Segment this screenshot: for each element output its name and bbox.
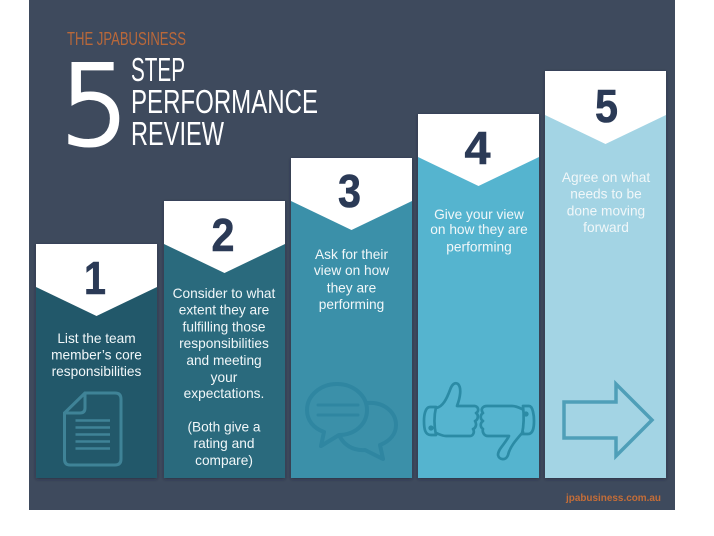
chevron: step 5	[545, 71, 666, 144]
icon: document	[64, 393, 121, 465]
chevron: step 3	[291, 158, 412, 230]
chevron: step 1	[36, 244, 157, 316]
panel: step 5	[545, 71, 666, 478]
text: step 3: performing	[319, 297, 384, 312]
text: step 2: expectations.	[184, 386, 264, 401]
text: step 2: your	[211, 370, 238, 385]
title block	[60, 29, 318, 170]
panel: step 4	[418, 114, 539, 478]
title eyebrow: THE JPABUSINESS	[67, 29, 186, 49]
number 5: 5	[595, 80, 618, 132]
text: step 2: extent they are	[179, 302, 269, 318]
text: step 1: member’s core	[51, 348, 142, 362]
text: step 1: List the team	[57, 331, 136, 346]
text: step 5: Agree on what	[562, 170, 650, 185]
text: step 4: Give your view	[434, 207, 524, 222]
text: step 2: rating and	[194, 436, 254, 451]
text: step 4: on how they are	[430, 222, 528, 237]
icon: speech bubbles	[307, 384, 396, 459]
panel: step 1	[36, 244, 157, 478]
text: step 5: done moving	[567, 204, 645, 218]
title line: review: REVIEW	[131, 115, 225, 152]
text: step 1: responsibilities	[52, 364, 142, 379]
number 1: 1	[84, 252, 106, 304]
text: step 2: Consider to what	[173, 286, 276, 301]
number 4: 4	[464, 122, 491, 174]
text: step 3: view on how	[314, 263, 389, 278]
text: step 3: they are	[327, 280, 376, 296]
text: step 2: fulfilling those	[183, 320, 265, 334]
panel: step 2	[164, 201, 285, 478]
text: step 2: responsibilities	[179, 336, 269, 351]
chevron: step 4	[418, 114, 539, 186]
footer url: jpabusiness.com.au	[565, 492, 661, 504]
text: step 3: Ask for their	[315, 247, 388, 262]
text: step 2: (Both give a	[187, 420, 261, 434]
icon: right arrow	[564, 384, 652, 456]
number 2: 2	[212, 209, 234, 261]
text: step 4: performing	[446, 240, 512, 254]
title line: performance: PERFORMANCE	[131, 83, 318, 120]
text: step 2: and meeting	[186, 353, 262, 368]
panel: step 3	[291, 158, 412, 478]
big numeral 5: 5	[60, 42, 130, 170]
icon: thumbs up and down	[424, 383, 534, 459]
title line: step: STEP	[131, 51, 185, 88]
chevron: step 2	[164, 201, 285, 273]
number 3: 3	[338, 165, 361, 217]
text: step 5: needs to be	[570, 186, 642, 202]
text: step 2: compare)	[195, 453, 253, 468]
text: step 5: forward	[583, 220, 629, 235]
